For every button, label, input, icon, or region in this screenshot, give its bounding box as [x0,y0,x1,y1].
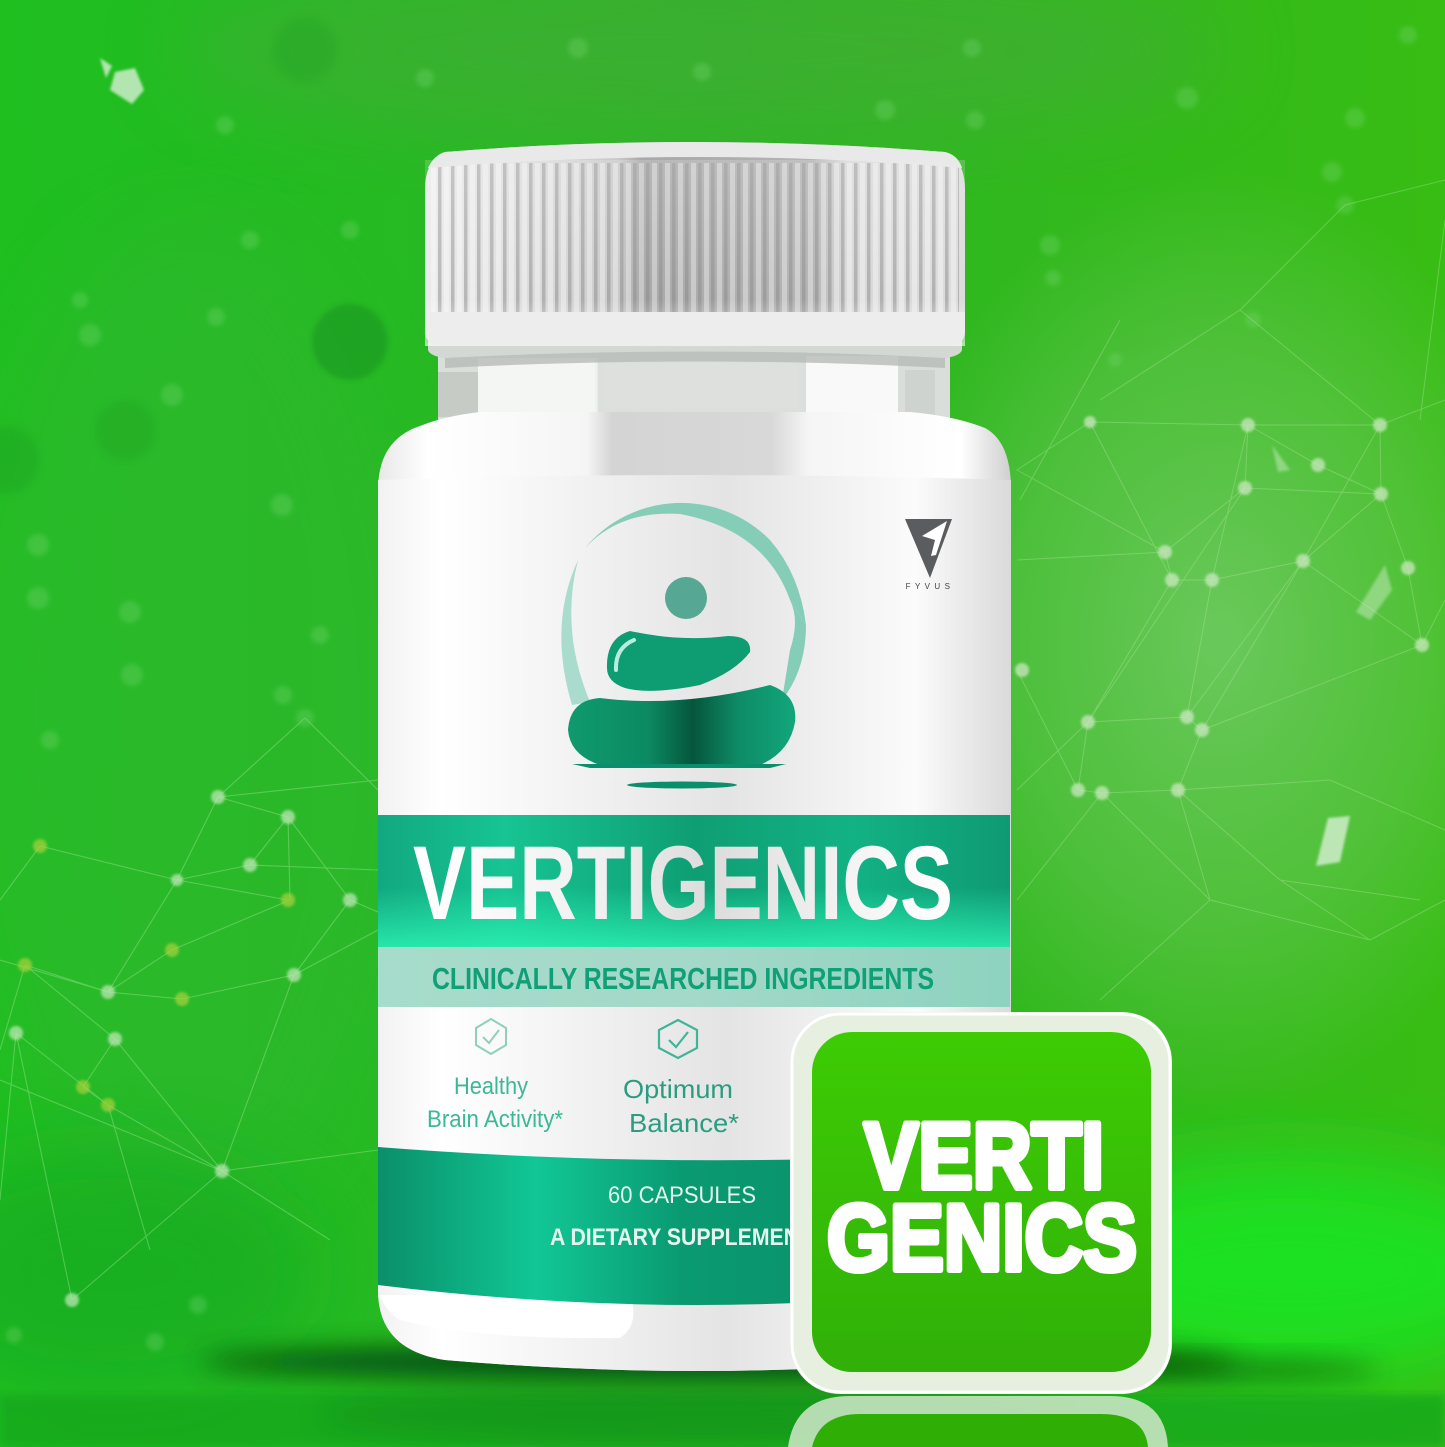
lower band: 60 CAPSULES [608,1182,756,1209]
badge [790,1012,1172,1394]
badge text: GENICS [827,1185,1137,1290]
lower band: A DIETARY SUPPLEMENT [550,1224,812,1251]
badge reflection [788,1396,1168,1447]
subtitle band: CLINICALLY RESEARCHED INGREDIENTS [432,961,934,996]
benefit: healthy brain activity: Healthy [454,1073,528,1100]
benefit: optimum balance [623,1020,739,1138]
bottle neck [428,338,962,430]
flakes [100,58,1392,866]
brand logo: FYVUS [906,582,954,591]
bottle cap [425,142,965,346]
title band: VERTIGENICS [413,825,953,942]
floor shadow [200,1345,1380,1445]
network nodes right [1015,416,1429,800]
network nodes left [9,790,357,1307]
label logo [561,503,806,788]
subtitle band [378,947,1010,1007]
lower band [378,1147,1010,1305]
badge text: VERTI [864,1103,1104,1208]
benefit: healthy brain activity [427,1019,563,1133]
badge text [827,1103,1137,1290]
network pattern right [1017,180,1445,1000]
bottle body [378,412,1011,1371]
brand logo [905,519,954,591]
network pattern left [0,718,378,1300]
benefit: optimum balance: Optimum [623,1074,733,1104]
bottle [378,142,1011,1371]
benefit: optimum balance: Balance* [629,1108,739,1138]
benefit: healthy brain activity: Brain Activity* [427,1106,563,1133]
